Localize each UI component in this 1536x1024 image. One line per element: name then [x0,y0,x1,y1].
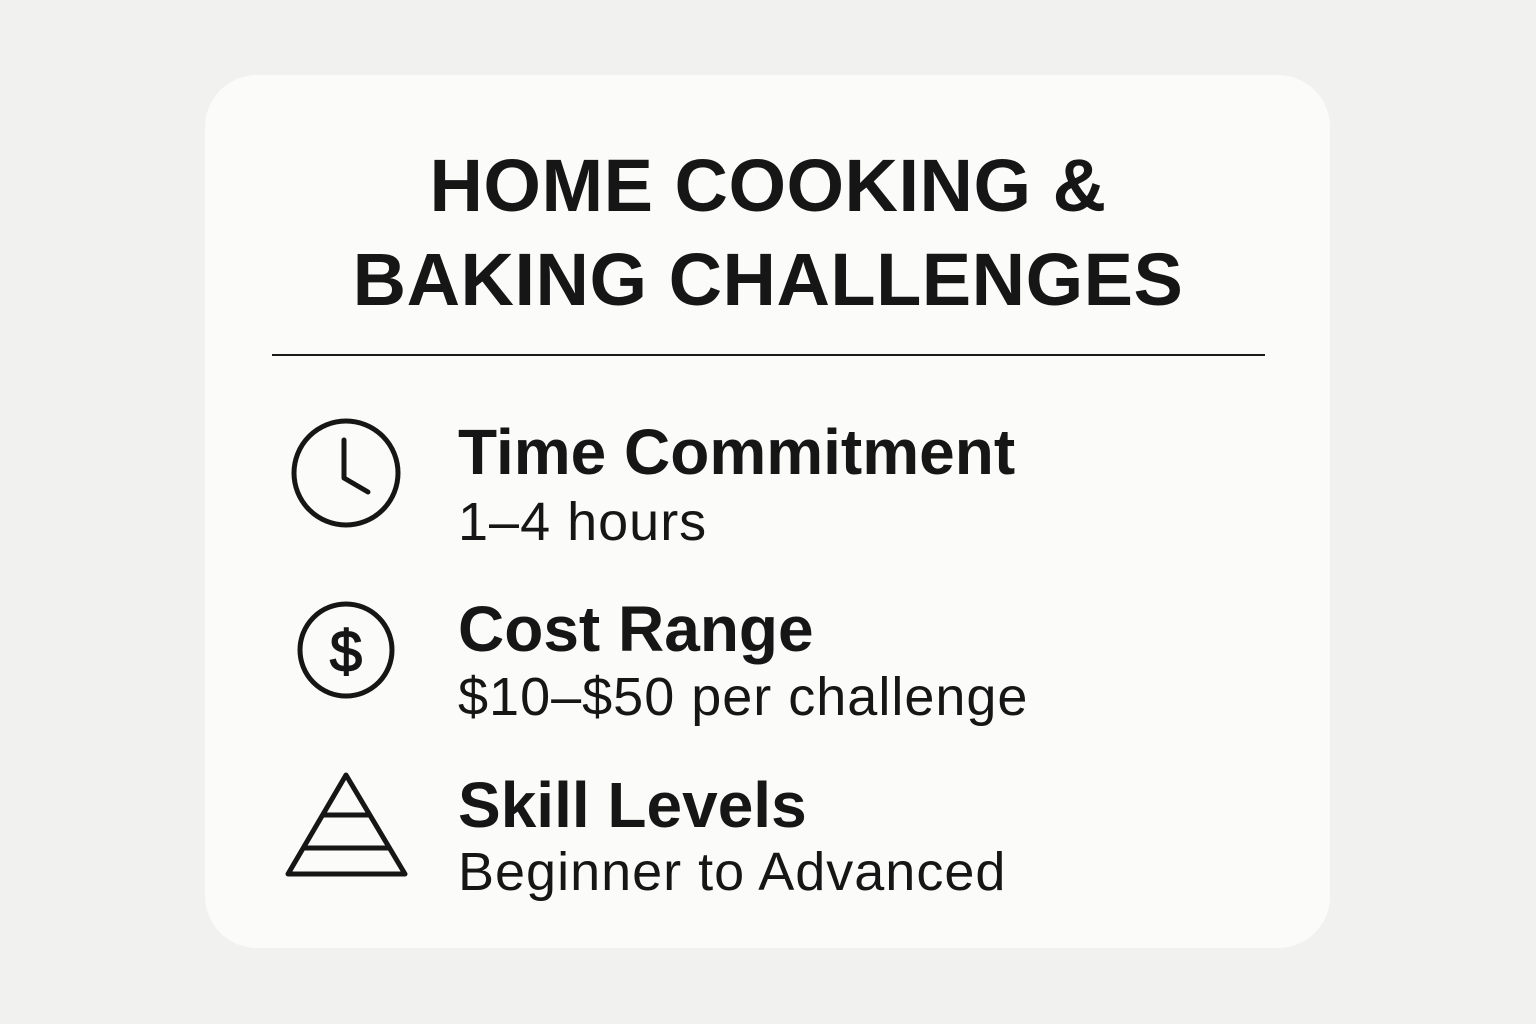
item: time heading: Time Commitment [458,416,1015,488]
item: skill value: Beginner to Advanced [458,842,1006,902]
title [353,144,1183,321]
title: BAKING CHALLENGES [353,238,1183,321]
icon: dollar: $ [330,619,362,684]
item: time value: 1–4 hours [458,492,707,552]
item: skill heading: Skill Levels [458,769,807,841]
card [205,75,1330,948]
title: HOME COOKING & [429,144,1107,227]
item: cost heading: Cost Range [458,593,814,665]
item: cost value: $10–$50 per challenge [458,667,1028,727]
